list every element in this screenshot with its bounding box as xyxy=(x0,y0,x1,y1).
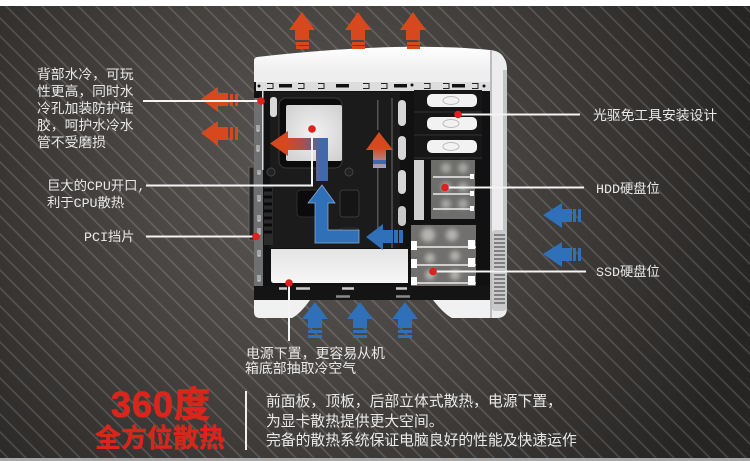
label: HDD: HDD硬盘位 xyxy=(596,180,660,197)
label: rear water cooling: 管不受磨损 xyxy=(37,135,106,152)
label: rear water cooling: 性更高，同时水 xyxy=(37,83,134,101)
top white panel xyxy=(254,47,490,82)
label: rear water cooling: 背部水冷，可玩 xyxy=(37,67,134,84)
bottom intake arrows xyxy=(302,302,418,338)
label: CPU cutout: 巨大的CPU开口, xyxy=(47,178,145,194)
description text xyxy=(266,392,577,450)
airflow: turn toward rear exhaust xyxy=(270,131,328,181)
bottom plate xyxy=(254,286,490,300)
airflow: rising to top xyxy=(366,132,393,168)
motherboard tray xyxy=(264,92,406,248)
drive cage: optical bays xyxy=(414,90,482,160)
label: rear water cooling: 胶，呵护水冷水 xyxy=(37,117,134,135)
case interior xyxy=(254,82,490,300)
case feet xyxy=(254,300,310,318)
interior airflow arrows xyxy=(270,131,403,250)
CPU cutout radiator window xyxy=(286,105,342,161)
airflow: front intake xyxy=(366,224,393,250)
heading: 360 degrees: 360度 xyxy=(111,384,211,425)
callout dots xyxy=(252,97,462,287)
label: power supply: 电源下置，更容易从机 xyxy=(246,345,385,363)
PCI bracket cover xyxy=(249,167,254,240)
side bay xyxy=(414,160,424,220)
label: CPU cutout xyxy=(47,178,145,211)
label: SSD: SSD硬盘位 xyxy=(596,263,660,280)
subheading: 全方位散热 xyxy=(95,423,225,453)
label: rear water cooling xyxy=(37,67,134,152)
description text: 为显卡散热提供更大空间。 xyxy=(266,413,444,431)
HDD cage xyxy=(431,160,475,219)
front vent xyxy=(492,230,506,311)
rear exhaust arrows xyxy=(201,87,238,146)
label: optical drive: 光驱免工具安装设计 xyxy=(593,108,717,125)
airflow: bottom L turn xyxy=(308,185,359,243)
PC case xyxy=(249,47,507,318)
case front panel xyxy=(488,50,507,318)
power supply bay xyxy=(271,249,408,283)
label: rear water cooling: 冷孔加装防护硅 xyxy=(37,101,134,118)
front intake arrows xyxy=(543,203,581,267)
rear rail xyxy=(254,90,264,295)
leader lines xyxy=(143,101,586,341)
label: PCI bracket: PCI挡片 xyxy=(84,229,135,245)
description text: 前面板，顶板，后部立体式散热，电源下置， xyxy=(266,392,562,411)
SSD cage xyxy=(411,225,476,286)
label: CPU cutout: 利于CPU散热 xyxy=(47,195,124,211)
description text: 完备的散热系统保证电脑良好的性能及快速运作 xyxy=(266,432,577,450)
divider xyxy=(245,391,247,450)
top exhaust arrows xyxy=(289,12,426,49)
top slots xyxy=(256,82,490,91)
label: power supply: 箱底部抽取冷空气 xyxy=(245,361,356,378)
label: power supply xyxy=(245,345,385,378)
